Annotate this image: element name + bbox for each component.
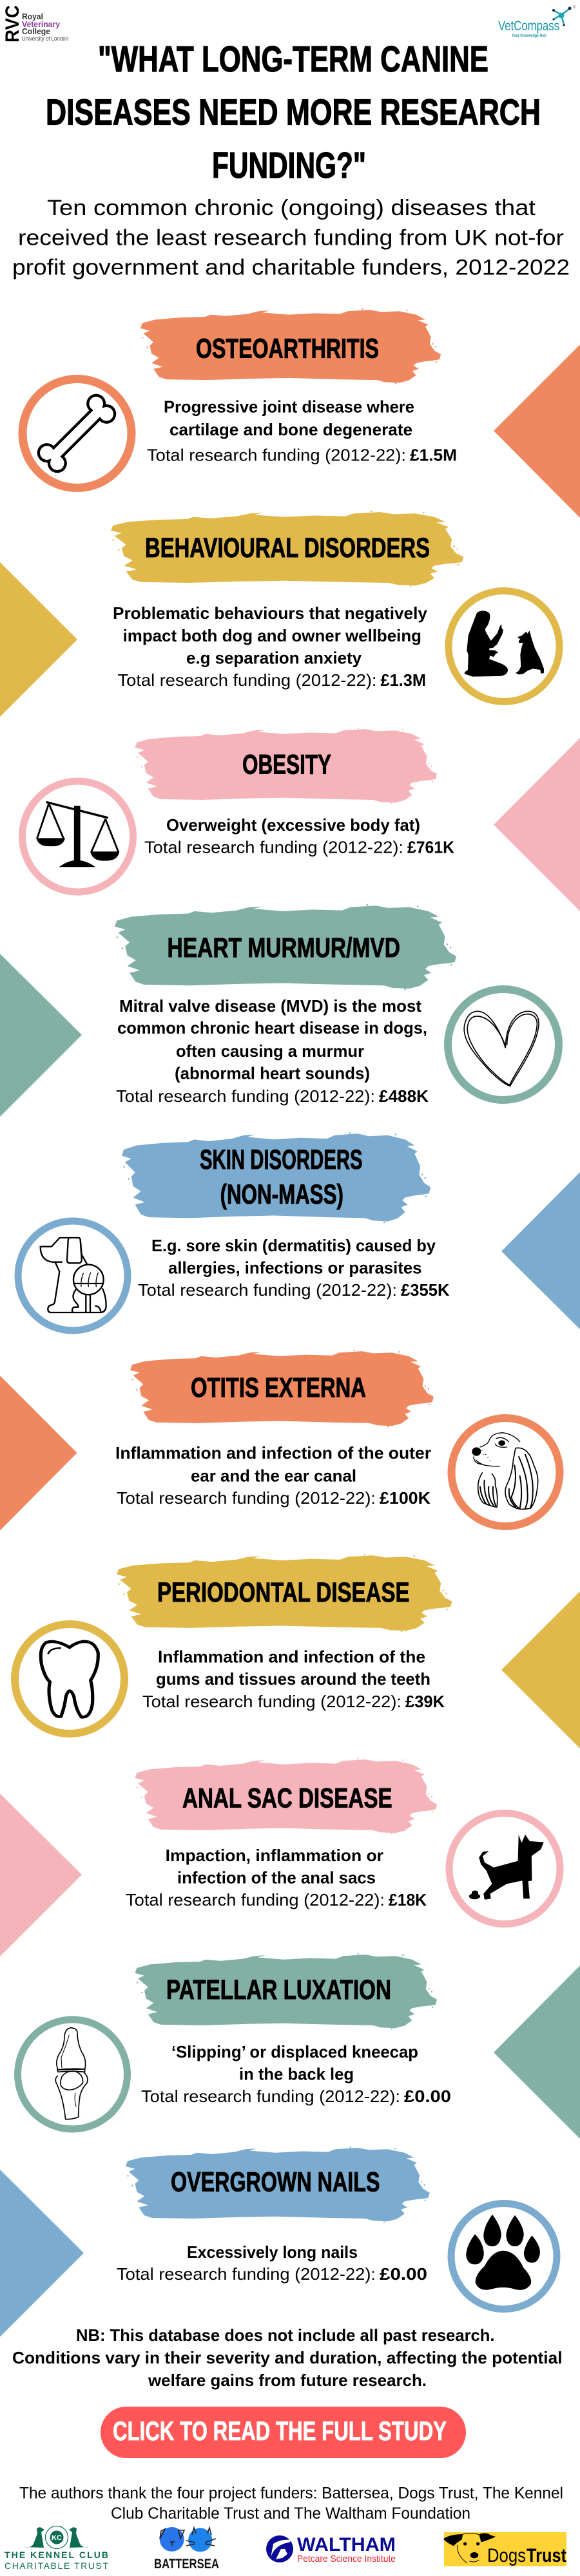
arrow: blue triangle	[501, 1172, 580, 1329]
icon: weighing scales	[22, 781, 133, 892]
description: heart murmur: Mitral valve disease (MVD) is the most	[119, 996, 421, 1016]
description: obesity: Overweight (excessive body fat)	[166, 815, 420, 835]
subtitle: Ten common chronic (ongoing) diseases that	[47, 196, 536, 220]
heading: periodontal disease: PERIODONTAL DISEASE	[157, 1577, 410, 1608]
panel: skin disorders	[18, 1132, 580, 1331]
icon: person training dog	[449, 591, 559, 702]
description: periodontal disease: gums and tissues around the teeth	[156, 1669, 430, 1689]
description: overgrown nails: £0.00	[380, 2264, 427, 2284]
logo: Waltham: WALTHAM	[297, 2534, 396, 2555]
arrow: orange triangle	[494, 345, 580, 518]
description: overgrown nails: Excessively long nails	[187, 2242, 358, 2262]
logo: Dogs Trust	[444, 2532, 566, 2566]
logo: Battersea: BATTERSEA	[154, 2557, 219, 2571]
description: obesity: Total research funding (2012-22):	[144, 837, 403, 857]
heading: anal sac disease: ANAL SAC DISEASE	[182, 1783, 392, 1814]
logo: Royal Veterinary College	[2, 5, 68, 43]
acknowledgements: Club Charitable Trust and The Waltham Foundation	[111, 2505, 470, 2523]
description: skin disorders	[138, 1236, 450, 1300]
logo: VetCompass: Your Knowledge Hub	[512, 33, 546, 38]
arrow: orange triangle	[0, 1376, 77, 1530]
description: overgrown nails	[117, 2242, 427, 2284]
description: patellar luxation	[141, 2042, 451, 2106]
description: behavioural disorders: impact both dog and owner wellbeing	[123, 626, 421, 645]
icon: dog with magnified skin	[18, 1221, 128, 1331]
description: behavioural disorders: £1.3M	[380, 670, 426, 690]
description: anal sac disease	[126, 1846, 427, 1909]
heading: heart murmur/MVD	[115, 904, 456, 990]
title: FUNDING?"	[212, 145, 366, 186]
logo: Royal Veterinary College: Royal	[22, 12, 43, 21]
description: periodontal disease: £39K	[405, 1692, 445, 1711]
arrow: yellow triangle	[0, 562, 77, 717]
icon: paw with claws	[451, 2204, 557, 2309]
icon: tooth	[15, 1624, 124, 1734]
description: skin disorders: E.g. sore skin (dermatitis) caused by	[151, 1236, 436, 1255]
heading: obesity	[135, 728, 437, 804]
description: osteoarthritis: cartilage and bone degenerate	[169, 420, 412, 439]
heading: periodontal disease	[117, 1554, 452, 1633]
description: heart murmur	[116, 996, 429, 1106]
icon: spaniel head	[451, 1418, 559, 1526]
panel: heart murmur	[0, 904, 559, 1117]
icon: knee joint	[18, 2020, 128, 2129]
description: behavioural disorders: Problematic behaviours that negatively	[113, 603, 428, 623]
heading: otitis externa	[130, 1350, 434, 1427]
icon: bone	[23, 379, 131, 488]
panel: overgrown nails	[0, 2146, 557, 2337]
description: osteoarthritis: Progressive joint disease where	[164, 397, 414, 417]
heading: behavioural disorders	[111, 511, 463, 587]
acknowledgements: The authors thank the four project funders: Battersea, Dogs Trust, The Kennel	[19, 2485, 563, 2503]
description: anal sac disease: £18K	[389, 1890, 427, 1909]
heading: behavioural disorders: BEHAVIOURAL DISORDERS	[145, 533, 430, 564]
heading: skin disorders (non-mass)	[122, 1132, 430, 1223]
arrow: pink triangle	[494, 738, 580, 911]
description: heart murmur: £488K	[379, 1086, 429, 1106]
heading: anal sac disease	[135, 1758, 437, 1835]
button: read the full study: CLICK TO READ THE FULL STUDY	[113, 2416, 447, 2446]
description: behavioural disorders	[113, 603, 428, 690]
logo: The Kennel Club Charitable Trust: KC	[52, 2534, 62, 2542]
description: heart murmur: (abnormal heart sounds)	[175, 1064, 370, 1083]
panel: osteoarthritis	[23, 308, 580, 518]
logo: VetCompass: VetCompass	[498, 19, 559, 33]
arrow: blue triangle	[0, 2170, 84, 2337]
panel: behavioural disorders	[0, 511, 559, 717]
description: behavioural disorders: e.g separation anxiety	[186, 649, 362, 668]
heading: osteoarthritis	[140, 308, 441, 384]
description: anal sac disease: Impaction, inflammation or	[166, 1846, 383, 1865]
heading: patellar luxation: PATELLAR LUXATION	[166, 1975, 391, 2005]
logo: Royal Veterinary College: Veterinary	[22, 20, 60, 29]
panel: periodontal disease	[15, 1554, 580, 1748]
description: otitis externa: Total research funding (2012-22):	[117, 1488, 376, 1508]
description: behavioural disorders: Total research funding (2012-22):	[117, 670, 376, 690]
description: overgrown nails: Total research funding (2012-22):	[117, 2264, 376, 2284]
logo: Waltham: Petcare Science Institute	[297, 2553, 396, 2564]
heading: otitis externa: OTITIS EXTERNA	[191, 1372, 366, 1403]
panel: patellar luxation	[18, 1953, 580, 2139]
heading: skin disorders (non-mass): SKIN DISORDERS	[200, 1144, 363, 1175]
subtitle: received the least research funding from UK not-for	[18, 225, 564, 250]
panel: anal sac disease	[0, 1758, 560, 1956]
logo: Royal Veterinary College: College	[22, 27, 50, 36]
note: database caveat: Conditions vary in their severity and duration, affecting the potential	[12, 2348, 562, 2367]
note: database caveat	[12, 2325, 562, 2390]
description: anal sac disease: infection of the anal sacs	[177, 1868, 376, 1887]
acknowledgements	[19, 2485, 563, 2523]
arrow: pink triangle	[0, 1794, 82, 1956]
description: patellar luxation: in the back leg	[239, 2065, 354, 2084]
description: obesity: £761K	[407, 837, 454, 857]
logo: The Kennel Club Charitable Trust: THE KENNEL CLUB	[5, 2550, 108, 2560]
logo: Dogs Trust: Dogs	[487, 2545, 526, 2566]
button: read the full study	[101, 2407, 466, 2458]
logo: The Kennel Club Charitable Trust	[5, 2526, 108, 2571]
description: obesity	[144, 815, 454, 857]
panel: obesity	[22, 728, 580, 911]
description: heart murmur: Total research funding (2012-22):	[116, 1086, 375, 1106]
icon: dog with poo	[449, 1814, 560, 1924]
heading: skin disorders (non-mass): (NON-MASS)	[220, 1179, 343, 1210]
description: periodontal disease: Inflammation and infection of the	[158, 1647, 425, 1667]
description: otitis externa: Inflammation and infection of the outer	[115, 1443, 431, 1463]
heading: heart murmur/MVD: HEART MURMUR/MVD	[168, 933, 400, 963]
note: database caveat: welfare gains from future research.	[148, 2371, 427, 2390]
description: otitis externa	[115, 1443, 431, 1508]
arrow: teal triangle	[0, 954, 82, 1117]
heading: obesity: OBESITY	[242, 750, 331, 781]
logo: Royal Veterinary College: RVC	[2, 5, 23, 43]
description: skin disorders: allergies, infections or parasites	[168, 1258, 421, 1278]
note: database caveat: NB: This database does not include all past research.	[76, 2325, 495, 2345]
description: skin disorders: Total research funding (2012-22):	[138, 1280, 397, 1300]
panel: otitis externa	[0, 1350, 559, 1530]
logo: Dogs Trust: Trust	[527, 2545, 566, 2566]
description: patellar luxation: £0.00	[404, 2087, 451, 2106]
description: otitis externa: ear and the ear canal	[191, 1466, 356, 1485]
description: patellar luxation: ‘Slipping’ or displaced kneecap	[171, 2042, 418, 2061]
description: heart murmur: often causing a murmur	[176, 1041, 364, 1061]
heading: patellar luxation	[135, 1953, 437, 2030]
logo: Waltham	[266, 2534, 396, 2564]
heading: overgrown nails	[126, 2146, 430, 2223]
description: anal sac disease: Total research funding (2012-22):	[126, 1890, 385, 1909]
description: periodontal disease: Total research funding (2012-22):	[142, 1692, 401, 1711]
description: osteoarthritis	[147, 397, 457, 465]
description: heart murmur: common chronic heart disease in dogs,	[117, 1018, 427, 1037]
logo: Battersea	[154, 2527, 219, 2571]
description: periodontal disease	[142, 1647, 445, 1711]
description: osteoarthritis: £1.5M	[410, 446, 457, 465]
icon: heart	[448, 989, 559, 1100]
heading: osteoarthritis: OSTEOARTHRITIS	[196, 334, 379, 365]
arrow: teal triangle	[494, 1965, 580, 2139]
logo: VetCompass	[498, 5, 576, 38]
subtitle: profit government and charitable funders, 2012-2022	[12, 255, 570, 279]
heading: overgrown nails: OVERGROWN NAILS	[171, 2166, 380, 2197]
description: otitis externa: £100K	[380, 1488, 430, 1508]
logo: The Kennel Club Charitable Trust: CHARITABLE TRUST	[5, 2561, 108, 2571]
description: osteoarthritis: Total research funding (2012-22):	[147, 446, 406, 465]
subtitle	[12, 196, 570, 279]
title	[46, 39, 541, 186]
logo: Royal Veterinary College: University of London	[22, 35, 68, 43]
arrow: yellow triangle	[501, 1591, 580, 1748]
description: patellar luxation: Total research funding (2012-22):	[141, 2087, 400, 2106]
logo: VetCompass: ©	[573, 5, 576, 10]
description: skin disorders: £355K	[401, 1280, 450, 1300]
